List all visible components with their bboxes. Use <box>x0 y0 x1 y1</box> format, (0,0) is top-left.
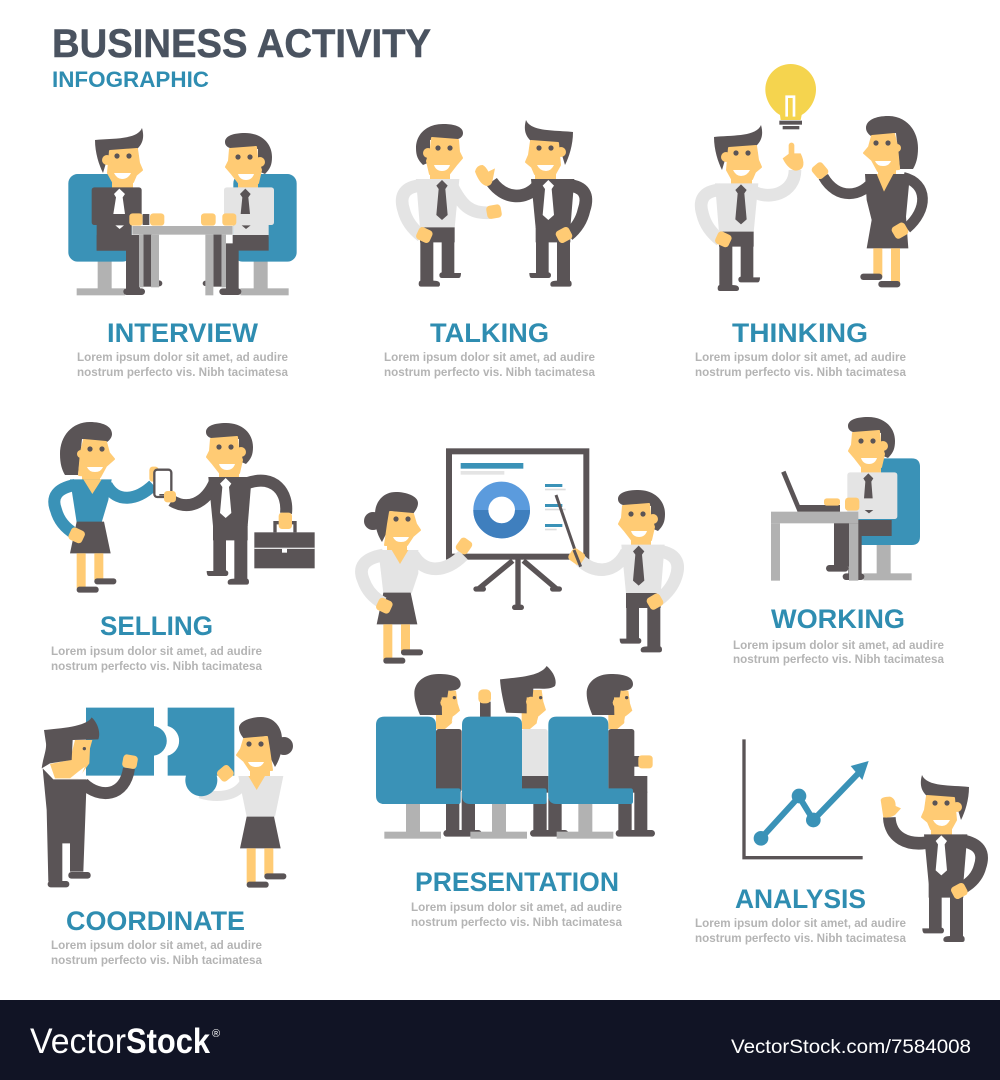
man torso and legs <box>922 834 967 942</box>
text: working description: Lorem ipsum dolor sit amet, ad audire <box>733 638 944 652</box>
text: selling description: Lorem ipsum dolor sit amet, ad audire <box>51 644 262 658</box>
heading: selling: SELLING <box>100 611 213 641</box>
text: working description <box>733 638 944 666</box>
scene: talking <box>402 120 586 287</box>
right man hands <box>475 165 574 244</box>
icon: laptop <box>783 472 840 512</box>
man arms <box>172 481 286 513</box>
scene: whiteboard presenters <box>361 451 678 664</box>
text: presentation description <box>411 900 622 929</box>
text: coordinate description: nostrum perfecto vis. Nibh tacimatesa <box>51 953 262 967</box>
text: coordinate description <box>51 938 262 967</box>
icon: light bulb <box>765 64 816 129</box>
heading: working: WORKING <box>771 604 905 634</box>
scene: thinking <box>701 64 923 291</box>
analysis man head <box>921 775 969 836</box>
woman hands <box>375 536 474 615</box>
working man and desk <box>771 472 897 581</box>
icon: puzzle left piece <box>86 708 167 776</box>
footer bar <box>0 1000 1000 1080</box>
text: interview description: Lorem ipsum dolor sit amet, ad audire <box>77 350 288 364</box>
man hands <box>567 547 665 611</box>
audience member two head <box>500 666 556 729</box>
man torso and legs <box>715 183 760 291</box>
working man head <box>848 417 895 477</box>
man side head <box>42 717 99 778</box>
board frame <box>449 451 586 557</box>
interview bodies and table <box>92 187 274 295</box>
interview right man head <box>225 133 272 193</box>
raised arm <box>478 689 491 718</box>
text: selling description <box>51 644 262 673</box>
man hands <box>881 797 969 900</box>
selling bodies <box>54 467 315 593</box>
presenter woman head <box>364 492 420 552</box>
talking left man head <box>416 124 463 184</box>
line chart with arrow <box>754 761 869 846</box>
footer image id: VectorStock.com/7584008 <box>731 1037 971 1058</box>
footer logo: ® <box>212 1028 220 1040</box>
heading: thinking: THINKING <box>732 318 868 348</box>
left chair <box>68 174 132 295</box>
text: thinking description <box>695 350 906 379</box>
man body <box>43 768 91 887</box>
text: working description: nostrum perfecto vis. Nibh tacimatesa <box>733 652 944 666</box>
man arms <box>889 817 982 888</box>
woman top <box>378 550 418 593</box>
scene: selling <box>54 422 315 593</box>
man arms <box>701 170 795 240</box>
seat three <box>548 717 633 839</box>
text: interview description: nostrum perfecto vis. Nibh tacimatesa <box>77 365 288 379</box>
heading: coordinate: COORDINATE <box>66 906 245 936</box>
left man torso and legs <box>416 179 461 287</box>
audience member three body <box>608 729 655 837</box>
right man body <box>203 187 274 295</box>
woman arms <box>361 555 463 603</box>
text: talking description: Lorem ipsum dolor sit amet, ad audire <box>384 350 595 364</box>
text: presentation description: nostrum perfecto vis. Nibh tacimatesa <box>411 915 622 929</box>
subtitle: infographic: INFOGRAPHIC <box>52 67 209 92</box>
desk <box>771 512 858 581</box>
thinking woman head <box>864 116 918 178</box>
woman hands <box>67 467 159 544</box>
icon: puzzle right piece <box>168 708 234 796</box>
donut chart <box>481 489 522 531</box>
woman skirt and legs <box>240 817 286 888</box>
text: thinking description: Lorem ipsum dolor sit amet, ad audire <box>695 350 906 364</box>
woman top <box>70 479 112 522</box>
woman arms <box>54 485 153 534</box>
man torso and legs <box>207 477 252 585</box>
puzzle and figures <box>42 708 286 888</box>
woman hands <box>810 161 910 240</box>
thinking bodies and bulb <box>701 64 923 291</box>
man arms <box>580 551 678 600</box>
chart and body <box>744 739 982 942</box>
scene: analysis <box>744 739 982 942</box>
audience member one body <box>436 729 482 837</box>
man arm and hand <box>83 754 138 793</box>
heading: talking: TALKING <box>430 318 549 348</box>
right man torso and legs <box>529 179 574 287</box>
man hand holding phone <box>164 491 176 502</box>
coordinate woman head <box>237 717 293 777</box>
text: presentation description: Lorem ipsum dolor sit amet, ad audire <box>411 900 622 914</box>
footer logo: Vector <box>30 1022 126 1061</box>
selling woman head <box>60 422 114 484</box>
man shirt <box>847 472 897 519</box>
text: analysis description: Lorem ipsum dolor sit amet, ad audire <box>695 916 906 930</box>
audience member three head <box>587 674 633 729</box>
talking bodies <box>402 165 586 287</box>
footer logo: Stock <box>126 1022 210 1061</box>
text: talking description: nostrum perfecto vis. Nibh tacimatesa <box>384 365 595 379</box>
text: analysis description: nostrum perfecto vis. Nibh tacimatesa <box>695 931 906 945</box>
footer logo <box>30 1022 220 1061</box>
table <box>132 226 233 295</box>
talking right man head <box>525 120 573 181</box>
pointer stick <box>556 495 581 567</box>
audience member one head <box>414 674 461 729</box>
scene: interview <box>68 128 297 295</box>
woman arm <box>200 782 245 796</box>
man tie <box>863 473 873 513</box>
man torso and legs <box>620 545 665 652</box>
woman arms <box>823 177 923 228</box>
interview left man head <box>95 128 143 189</box>
left man hands <box>415 204 502 244</box>
hands on table <box>129 213 236 226</box>
right man arms <box>492 182 586 235</box>
board heading bars <box>461 463 523 475</box>
thinking man head <box>714 125 762 186</box>
scene: coordinate <box>42 708 293 888</box>
heading: presentation: PRESENTATION <box>415 867 619 897</box>
heading: analysis: ANALYSIS <box>735 884 866 914</box>
selling man head <box>206 423 253 483</box>
woman skirt and legs <box>377 593 423 664</box>
woman legs and shoes <box>860 248 900 287</box>
man hands <box>714 143 803 248</box>
board and bodies <box>361 451 678 664</box>
audience member two body <box>522 729 568 837</box>
office chair <box>847 458 920 580</box>
scene: presentation audience <box>376 666 655 839</box>
text: analysis description <box>695 916 906 945</box>
man legs <box>826 520 892 580</box>
woman skirt and legs <box>70 522 116 593</box>
left man body <box>92 187 162 295</box>
interview chairs <box>68 174 297 295</box>
woman top <box>238 776 283 817</box>
chart axes <box>744 739 863 858</box>
seat one <box>376 717 461 839</box>
text: thinking description: nostrum perfecto vis. Nibh tacimatesa <box>695 365 906 379</box>
seat two <box>462 717 547 839</box>
icon: smartphone <box>154 470 171 497</box>
presenter man head <box>618 490 665 550</box>
text: interview description <box>77 350 288 379</box>
text: selling description: nostrum perfecto vis. Nibh tacimatesa <box>51 659 262 673</box>
man hands <box>824 498 859 511</box>
right chair <box>233 174 297 295</box>
text: coordinate description: Lorem ipsum dolor sit amet, ad audire <box>51 938 262 952</box>
text: talking description <box>384 350 595 379</box>
scene: working <box>771 417 920 581</box>
left man arms <box>402 185 490 236</box>
icon: briefcase <box>254 513 315 568</box>
title: business activity: BUSINESS ACTIVITY <box>52 22 431 66</box>
board stand <box>476 558 559 607</box>
woman hand <box>215 764 235 783</box>
board legend bars <box>545 484 566 530</box>
woman dress <box>865 174 910 248</box>
heading: interview: INTERVIEW <box>107 318 259 348</box>
